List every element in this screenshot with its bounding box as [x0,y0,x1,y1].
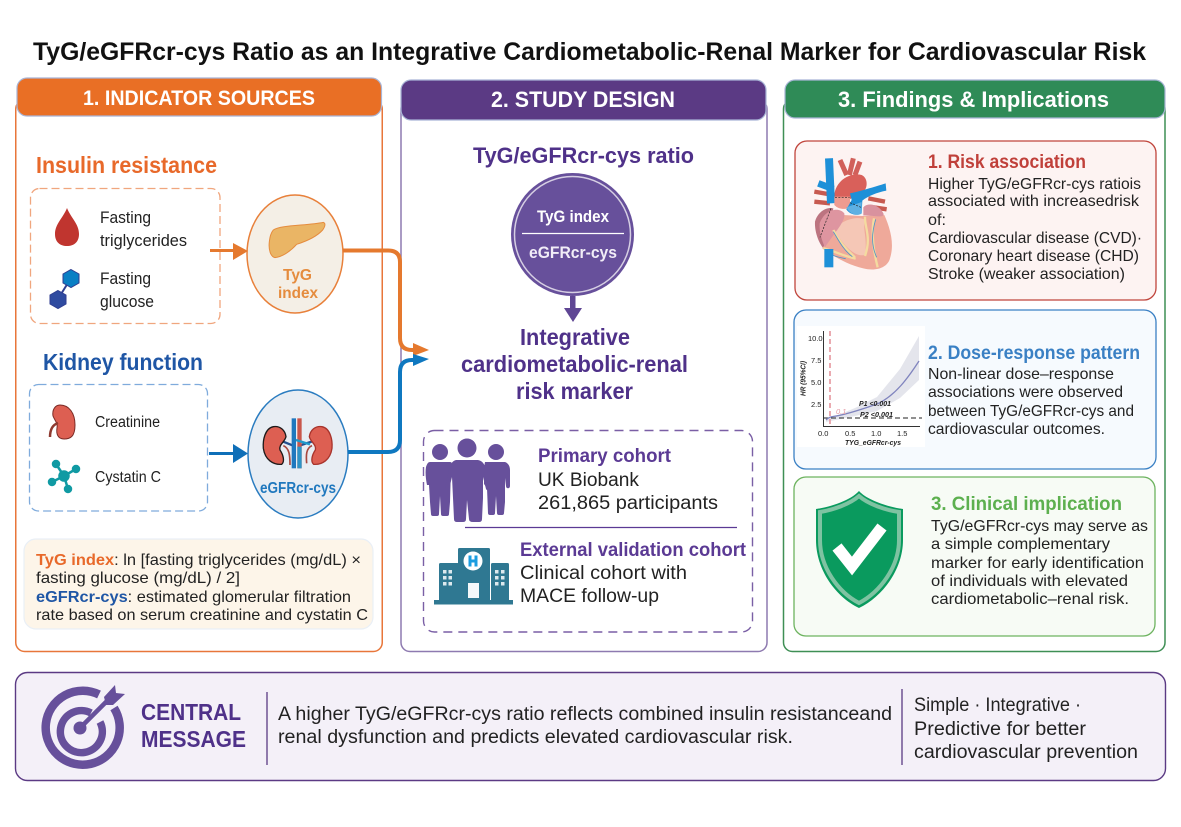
text: risk association [928,152,1142,283]
title: TyG/eGFRcr-cys Ratio as an Integrative Cardiometabolic-Renal Marker for Cardiovascular Risk [33,38,1146,66]
text: risk association: Stroke (weaker association) [928,266,1125,283]
heading: study design [401,80,766,120]
text: summary keywords: Simple · Integrative · [914,695,1081,716]
text: risk association: associated with increasedrisk [928,193,1140,210]
icon: people [426,438,510,522]
card: risk association [795,141,1156,300]
text: risk association: 1. Risk association [928,152,1086,173]
label: central message: MESSAGE [141,726,246,752]
arrow: eGFR to marker [348,354,429,452]
heading: findings and implications [785,80,1165,118]
text: dose-response pattern: cardiovascular outcomes. [928,421,1105,438]
ratio circle: TyG index [537,208,610,226]
text: clinical implication: cardiometabolic–renal risk. [931,591,1129,608]
arrow: ratio to marker [564,296,582,322]
label: eGFRcr-cys: eGFRcr-cys [260,480,336,497]
text: external validation cohort: External validation cohort [520,540,747,561]
arrow: insulin inputs to TyG [210,243,248,260]
chart: dose-response curve: 5.0 [811,378,821,387]
label: TyG index: index [278,285,318,302]
heading: integrative marker: risk marker [516,378,633,404]
definitions note: fasting glucose (mg/dL) / 2] [36,570,240,587]
label: cystatin C: Cystatin C [95,469,161,486]
chart: dose-response curve: 2.5 [811,400,821,409]
text: clinical implication: 3. Clinical implication [931,494,1122,515]
definitions note: rate based on serum creatinine and cystatin C [36,607,368,624]
icon: cystatin molecule [49,461,79,492]
heading: integrative marker [461,324,688,404]
text: primary cohort: UK Biobank [538,470,639,491]
chart: dose-response curve: P2 <0.001 [860,412,893,419]
text: dose-response pattern: between TyG/eGFRcr-cys and [928,403,1134,420]
icon: glucose molecule [50,270,79,308]
dashed box: cohorts [424,430,752,632]
text: external validation cohort: MACE follow-up [520,586,659,607]
panel: indicator sources [16,78,382,652]
text: dose-response pattern: 2. Dose-response pattern [928,343,1140,364]
text: risk association: Higher TyG/eGFRcr-cys ratiois [928,176,1141,193]
node: TyG index [247,195,343,313]
chart: dose-response curve: TYG_eGFRcr-cys [845,438,901,447]
chart: dose-response curve: 1.0 [871,429,881,438]
text: primary cohort: 261,865 participants [538,493,718,514]
icon: hospital [434,548,513,604]
chart: dose-response curve: 7.5 [811,356,821,365]
card: clinical implication [794,477,1155,636]
label: TyG index: TyG [283,267,312,284]
chart: dose-response curve: 1.5 [897,429,907,438]
text: main message [278,704,892,748]
heading: findings and implications: 3. Findings & Implications [838,87,1109,112]
text: dose-response pattern [928,343,1140,438]
text: main message: A higher TyG/eGFRcr-cys ratio reflects combined insulin resistanceand [278,704,892,725]
label: fasting glucose: Fasting [100,269,151,288]
heading: study design: 2. STUDY DESIGN [491,87,675,112]
text: clinical implication: of individuals with elevated [931,573,1128,590]
heading: integrative marker: cardiometabolic-renal [461,351,688,377]
ratio circle [511,173,634,296]
label: TyG index [278,267,318,302]
icon: liver [269,222,325,258]
text: summary keywords [914,695,1138,763]
heading: kidney function: Kidney function [43,349,203,375]
panel: central message [16,672,1166,780]
label: fasting glucose [100,269,154,311]
chart: dose-response curve: 0.5 [845,429,855,438]
chart: dose-response curve: 10.0 [808,334,823,343]
icon: heart [814,158,892,269]
icon: blood drop [55,208,79,246]
label: creatinine: Creatinine [95,414,160,431]
label: central message: CENTRAL [141,699,241,725]
definitions note: TyG index: ln [fasting triglycerides (mg/dL) × [36,552,361,569]
heading: insulin resistance: Insulin resistance [36,152,217,178]
text: clinical implication: TyG/eGFRcr-cys may serve as [931,518,1148,535]
text: dose-response pattern: Non-linear dose–response [928,366,1114,383]
ratio circle: eGFRcr-cys [529,244,617,262]
chart: dose-response curve: HR (95%CI) [800,360,808,396]
text: clinical implication [931,494,1148,608]
chart: dose-response curve: P1 <0.001 [859,401,891,408]
label: fasting triglycerides: triglycerides [100,231,187,250]
heading: indicator sources: 1. INDICATOR SOURCES [83,87,315,110]
card: dose-response pattern [794,310,1156,469]
text: external validation cohort [520,540,747,607]
dashed box: insulin inputs [30,188,220,324]
text: external validation cohort: Clinical cohort with [520,563,687,584]
label: fasting glucose: glucose [100,292,154,311]
label: central message [141,699,246,752]
label: fasting triglycerides [100,208,187,250]
icon: paired kidneys [263,418,332,468]
text: primary cohort [538,446,718,514]
heading: integrative marker: Integrative [520,324,630,350]
panel: study design [401,80,767,652]
text: risk association: of: [928,212,946,229]
text: clinical implication: a simple complementary [931,536,1110,553]
panel: findings and implications [784,80,1165,652]
icon: target with arrow [46,685,125,765]
chart: dose-response curve [797,326,925,447]
text: dose-response pattern: associations were observed [928,384,1123,401]
node: eGFRcr-cys [248,390,348,518]
arrow: TyG to marker [343,250,429,356]
heading: indicator sources [17,78,382,116]
text: primary cohort: Primary cohort [538,446,672,467]
label: fasting triglycerides: Fasting [100,208,151,227]
heading: ratio: TyG/eGFRcr-cys ratio [473,143,694,168]
arrow: kidney inputs to eGFR [209,444,248,463]
text: risk association: Cardiovascular disease (CVD)· [928,230,1142,247]
definitions note [24,539,373,629]
chart: dose-response curve: 0.0 [818,429,828,438]
dashed box: kidney inputs [30,384,208,511]
text: risk association: Coronary heart disease (CHD) [928,248,1139,265]
icon: kidney [50,405,75,439]
definitions note: eGFRcr-cys: estimated glomerular filtration [36,589,351,606]
text: main message: renal dysfunction and predicts elevated cardiovascular risk. [278,727,793,748]
text: clinical implication: marker for early identification [931,555,1144,572]
text: summary keywords: cardiovascular prevention [914,742,1138,763]
icon: shield [816,491,903,608]
text: summary keywords: Predictive for better [914,719,1087,740]
chart: dose-response curve: 0.1 [836,407,846,416]
